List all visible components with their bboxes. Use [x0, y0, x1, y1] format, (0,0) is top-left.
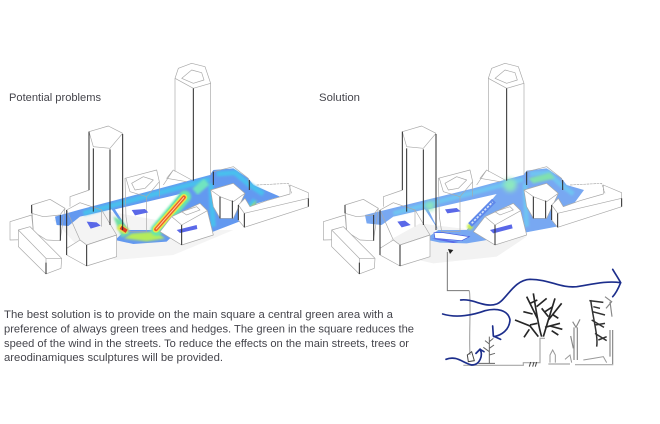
wind arrows: [443, 269, 621, 365]
body text: The best solution is to provide on the main square a central green area with a: [4, 309, 394, 321]
body text: [4, 309, 414, 364]
person and low shrubs: [467, 352, 537, 367]
statue and shrubs: [550, 350, 607, 363]
title: potential problems: Potential problems: [9, 92, 101, 104]
aerodynamic street sculptures: [470, 201, 494, 225]
small tree: [478, 337, 495, 363]
buildings: [323, 63, 622, 274]
buildings: [10, 63, 308, 274]
leader arrow to square: [447, 249, 469, 291]
body text: preference of always green trees and hedges. The green in the square reduces the: [4, 324, 414, 336]
blue ground patches: [397, 208, 513, 243]
diagram: solution wind map: [323, 63, 622, 274]
wind heat map: problem: [55, 168, 280, 244]
ground plane: [390, 223, 527, 263]
blue ground patches: [87, 209, 197, 233]
title: solution: Solution: [319, 92, 360, 104]
wind heat map: solution: [365, 168, 584, 243]
ground plane: [53, 210, 233, 260]
building edges: [345, 88, 622, 274]
body text: areodinamiques sculptures will be provided.: [4, 352, 223, 364]
body text: speed of the wind in the streets. To reduce the effects on the main streets, trees or: [4, 338, 409, 350]
central green area: [434, 233, 469, 241]
slim trees: [571, 297, 613, 364]
building edges: [32, 88, 308, 274]
wall and ground lines: [463, 291, 613, 365]
diagram: potential problems wind map: [10, 63, 308, 274]
section sketch: trees, wind and leader arrow: [443, 249, 621, 367]
large tree: [515, 293, 562, 337]
far tree: [589, 300, 607, 347]
